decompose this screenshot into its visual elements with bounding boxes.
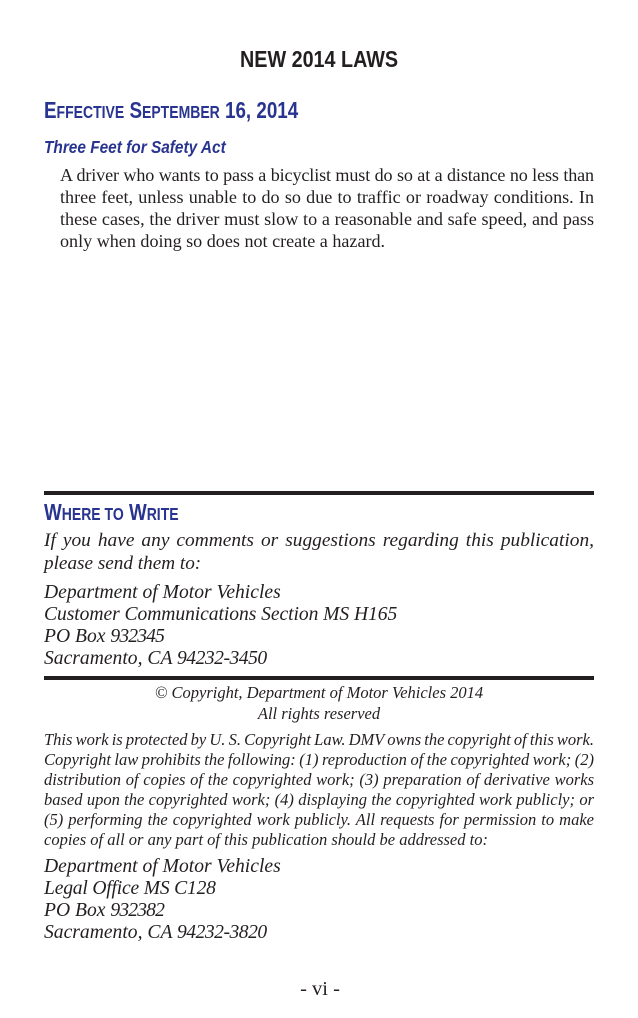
section heading: effective date: EFFECTIVE SEPTEMBER 16, 2014 — [44, 96, 298, 122]
address: customer communications: PO Box 932345 — [44, 626, 164, 647]
text block: comments request: please send them to: — [44, 553, 201, 574]
address: customer communications: Department of Motor Vehicles — [44, 582, 281, 603]
text block: copyright terms: based upon the copyrighted work; (4) displaying the copyrighted work publicly; or — [44, 790, 594, 809]
text block: comments request — [42, 530, 594, 574]
text block: act description: these cases, the driver must slow to a reasonable and safe speed, and pass — [60, 209, 594, 229]
text block: copyright terms: (5) performing the copyrighted work publicly. All requests for permission to make — [44, 810, 594, 829]
copyright notice: © Copyright, Department of Motor Vehicles 2014 — [155, 683, 483, 702]
title: NEW 2014 LAWS — [240, 46, 398, 72]
address: legal office — [44, 856, 281, 943]
page number: - vi - — [300, 978, 340, 1000]
text block: copyright terms: copies of all or any part of this publication should be addressed to: — [44, 830, 488, 849]
text block: act description: A driver who wants to pass a bicyclist must do so at a distance no less than — [60, 165, 594, 185]
copyright notice: All rights reserved — [258, 704, 380, 723]
address: customer communications: Sacramento, CA 94232-3450 — [44, 648, 267, 669]
copyright notice — [155, 683, 483, 723]
address: legal office: PO Box 932382 — [44, 900, 164, 921]
text block: act description — [60, 165, 594, 251]
text block: copyright terms — [44, 730, 594, 849]
address: legal office: Legal Office MS C128 — [44, 878, 216, 899]
text block: copyright terms: distribution of copies of the copyrighted work; (3) preparation of derivative works — [44, 770, 594, 789]
address: legal office: Department of Motor Vehicles — [44, 856, 281, 877]
section heading: where to write: WHERE TO WRITE — [44, 499, 179, 525]
text block: act description: only when doing so does not create a hazard. — [60, 231, 385, 251]
text block: comments request: If you have any comments or suggestions regarding this publication, — [44, 530, 594, 551]
text block: copyright terms: Copyright law prohibits the following: (1) reproduction of the copyrighted work; (2) — [44, 750, 594, 769]
text block: copyright terms: This work is protected by U. S. Copyright Law. DMV owns the copyright of this work. — [44, 730, 594, 749]
subheading: act name: Three Feet for Safety Act — [44, 137, 226, 157]
address: customer communications: Customer Communications Section MS H165 — [44, 604, 397, 625]
address: legal office: Sacramento, CA 94232-3820 — [44, 922, 267, 943]
text block: act description: three feet, unless unable to do so due to traffic or roadway conditions. In — [60, 187, 594, 207]
address: customer communications — [44, 582, 397, 669]
